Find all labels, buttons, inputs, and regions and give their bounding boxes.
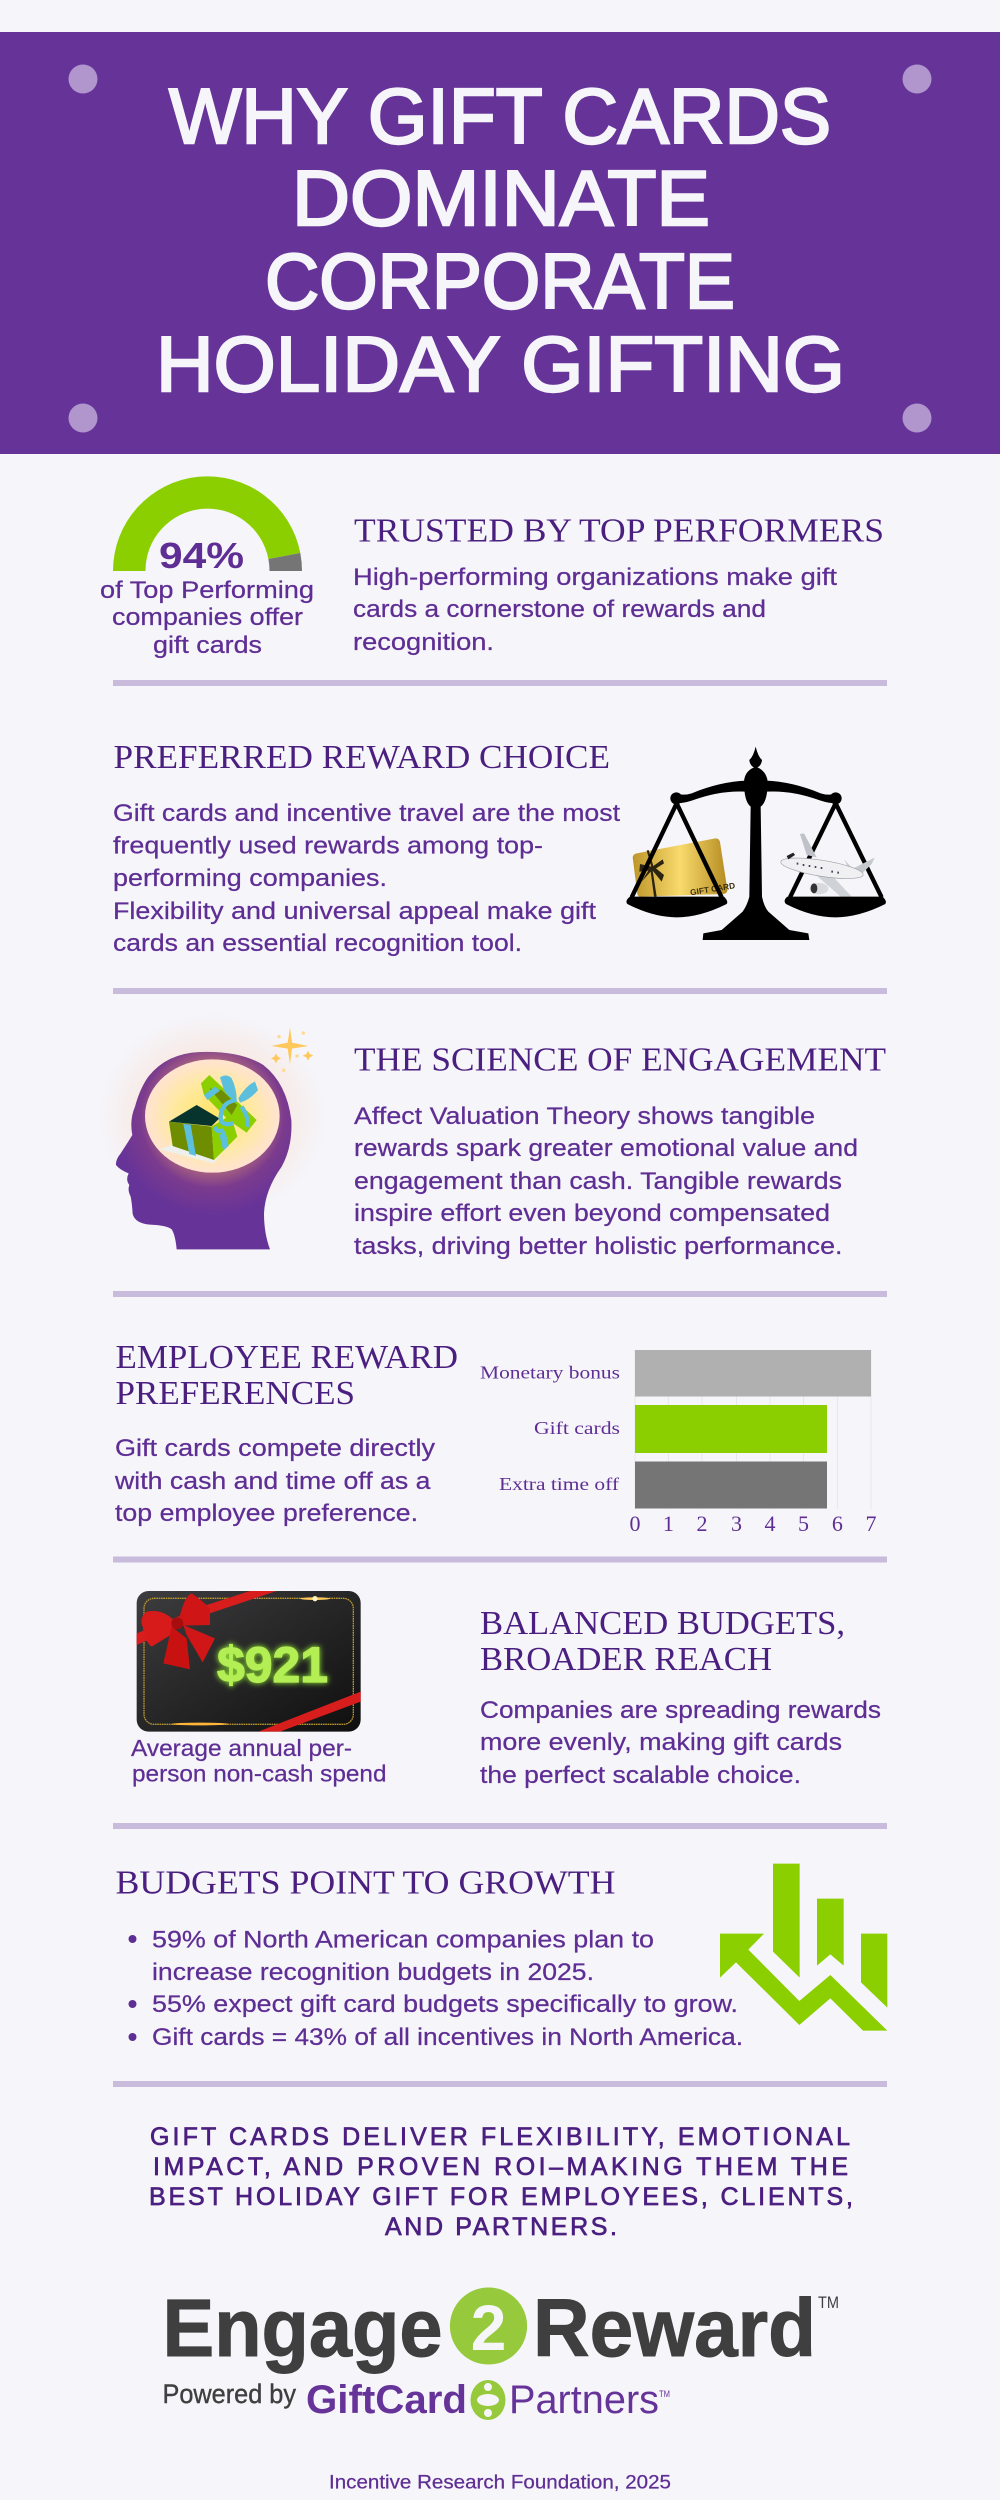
source credit: Incentive Research Foundation, 2025 — [329, 2472, 671, 2494]
body text — [353, 564, 837, 656]
bullet list: increase recognition budgets in 2025. — [152, 1959, 594, 1986]
bullet list: 59% of North American companies plan to — [152, 1926, 654, 1954]
bar chart: reward preferences: Gift cards — [534, 1418, 620, 1438]
closing statement: IMPACT, AND PROVEN ROI–MAKING THEM THE — [153, 2153, 848, 2181]
body text: performing companies. — [113, 865, 387, 892]
bar chart: reward preferences: 0 — [630, 1511, 640, 1536]
gauge caption — [100, 577, 314, 659]
bar chart: reward preferences: 4 — [764, 1511, 776, 1536]
body text: cards an essential recognition tool. — [113, 930, 522, 957]
bullet list: Gift cards = 43% of all incentives in North America. — [152, 2024, 743, 2051]
body text — [114, 1435, 436, 1527]
body text: top employee preference. — [115, 1500, 418, 1527]
body text: more evenly, making gift cards — [480, 1729, 842, 1756]
heading: THE SCIENCE OF ENGAGEMENT — [354, 1042, 886, 1078]
panel: balanced budgets — [131, 1591, 881, 1789]
bar chart: reward preferences: 1 — [663, 1511, 674, 1536]
bar chart: reward preferences: 3 — [731, 1511, 742, 1536]
body text: tasks, driving better holistic performance. — [354, 1233, 842, 1260]
body text: High-performing organizations make gift — [353, 564, 837, 591]
body text — [480, 1697, 881, 1789]
panel: budgets point to growth — [116, 1864, 887, 2051]
title: HOLIDAY GIFTING — [156, 320, 845, 408]
heading — [480, 1605, 845, 1678]
bar chart: reward preferences — [480, 1350, 876, 1536]
body text: Gift cards compete directly — [115, 1435, 436, 1462]
heading: BALANCED BUDGETS, — [480, 1605, 845, 1642]
body text: recognition. — [353, 629, 494, 656]
bullet list: 55% expect gift card budgets specifically to grow. — [152, 1991, 738, 2018]
panel: the science of engagement — [99, 1013, 886, 1260]
body text — [113, 800, 620, 957]
panel: preferred reward choice — [113, 739, 886, 957]
heading: PREFERRED REWARD CHOICE — [114, 739, 610, 776]
logo: powered by GiftCard Partners: GiftCard — [306, 2378, 467, 2422]
bar chart: reward preferences: 7 — [866, 1511, 876, 1536]
card caption: Average annual per- — [131, 1735, 352, 1761]
title: DOMINATE — [292, 154, 710, 242]
body text: engagement than cash. Tangible rewards — [354, 1168, 842, 1195]
icon: $921 gift card — [137, 1591, 361, 1732]
icon: growth arrow and bars — [720, 1864, 887, 2031]
card caption — [131, 1735, 386, 1786]
logo: Engage2Reward — [162, 2283, 839, 2374]
body text: cards a cornerstone of rewards and — [353, 596, 766, 623]
heading: EMPLOYEE REWARD — [116, 1339, 458, 1376]
logo: powered by GiftCard Partners: Powered by — [162, 2379, 296, 2409]
bar chart: reward preferences: Extra time off — [499, 1474, 619, 1494]
closing statement: BEST HOLIDAY GIFT FOR EMPLOYEES, CLIENTS, — [149, 2183, 853, 2211]
bar chart: reward preferences: Monetary bonus — [480, 1362, 620, 1382]
logo: Engage2Reward: TM — [818, 2293, 839, 2312]
logo: Engage2Reward: 2 — [471, 2292, 506, 2364]
logo: powered by GiftCard Partners: TM — [659, 2389, 670, 2399]
heading: PREFERENCES — [116, 1375, 355, 1412]
body text: inspire effort even beyond compensated — [354, 1200, 830, 1227]
gauge caption: of Top Performing — [100, 577, 314, 604]
title: CORPORATE — [265, 237, 735, 325]
bar chart: reward preferences: 5 — [798, 1511, 809, 1536]
body text: rewards spark greater emotional value and — [354, 1135, 858, 1162]
logo: powered by GiftCard Partners: Partners — [509, 2378, 659, 2422]
icon: balance scale with gift card and airplane: GIFT CARD — [689, 880, 736, 897]
panel: employee reward preferences — [114, 1339, 877, 1536]
icon: head with gift box — [99, 1013, 326, 1249]
gauge chart 94% — [113, 476, 302, 576]
gauge caption: companies offer — [112, 604, 303, 631]
body text: the perfect scalable choice. — [480, 1762, 801, 1789]
closing statement — [149, 2123, 853, 2241]
body text — [354, 1103, 858, 1260]
title — [156, 72, 845, 408]
bar chart: reward preferences: 6 — [832, 1511, 843, 1536]
closing statement: AND PARTNERS. — [385, 2213, 617, 2241]
logo: Engage2Reward: Reward — [533, 2283, 816, 2374]
logo: Engage2Reward: Engage — [162, 2283, 442, 2374]
heading: BUDGETS POINT TO GROWTH — [116, 1864, 616, 1902]
bar chart: reward preferences: 2 — [696, 1511, 708, 1536]
title: WHY GIFT CARDS — [169, 72, 831, 160]
panel: trusted by top performers — [100, 476, 884, 659]
icon: balance scale with gift card and airplane — [626, 747, 886, 940]
gauge chart 94%: 94% — [159, 535, 244, 576]
title banner — [0, 32, 1000, 454]
body text: frequently used rewards among top- — [113, 832, 543, 860]
body text: Affect Valuation Theory shows tangible — [354, 1103, 815, 1130]
logo: powered by GiftCard Partners — [162, 2378, 670, 2422]
heading — [116, 1339, 458, 1412]
icon: $921 gift card: $921 — [217, 1637, 328, 1693]
icon: $921 gift card: $921 — [217, 1637, 328, 1693]
closing statement: GIFT CARDS DELIVER FLEXIBILITY, EMOTIONAL — [150, 2123, 850, 2151]
heading: BROADER REACH — [480, 1641, 772, 1678]
heading: TRUSTED BY TOP PERFORMERS — [354, 512, 884, 550]
body text: Flexibility and universal appeal make gift — [113, 898, 596, 925]
body text: with cash and time off as a — [114, 1468, 431, 1495]
card caption: person non-cash spend — [132, 1760, 386, 1786]
bullet list — [128, 1926, 743, 2051]
body text: Companies are spreading rewards — [480, 1697, 881, 1724]
body text: Gift cards and incentive travel are the most — [113, 800, 620, 827]
gauge caption: gift cards — [153, 632, 262, 659]
